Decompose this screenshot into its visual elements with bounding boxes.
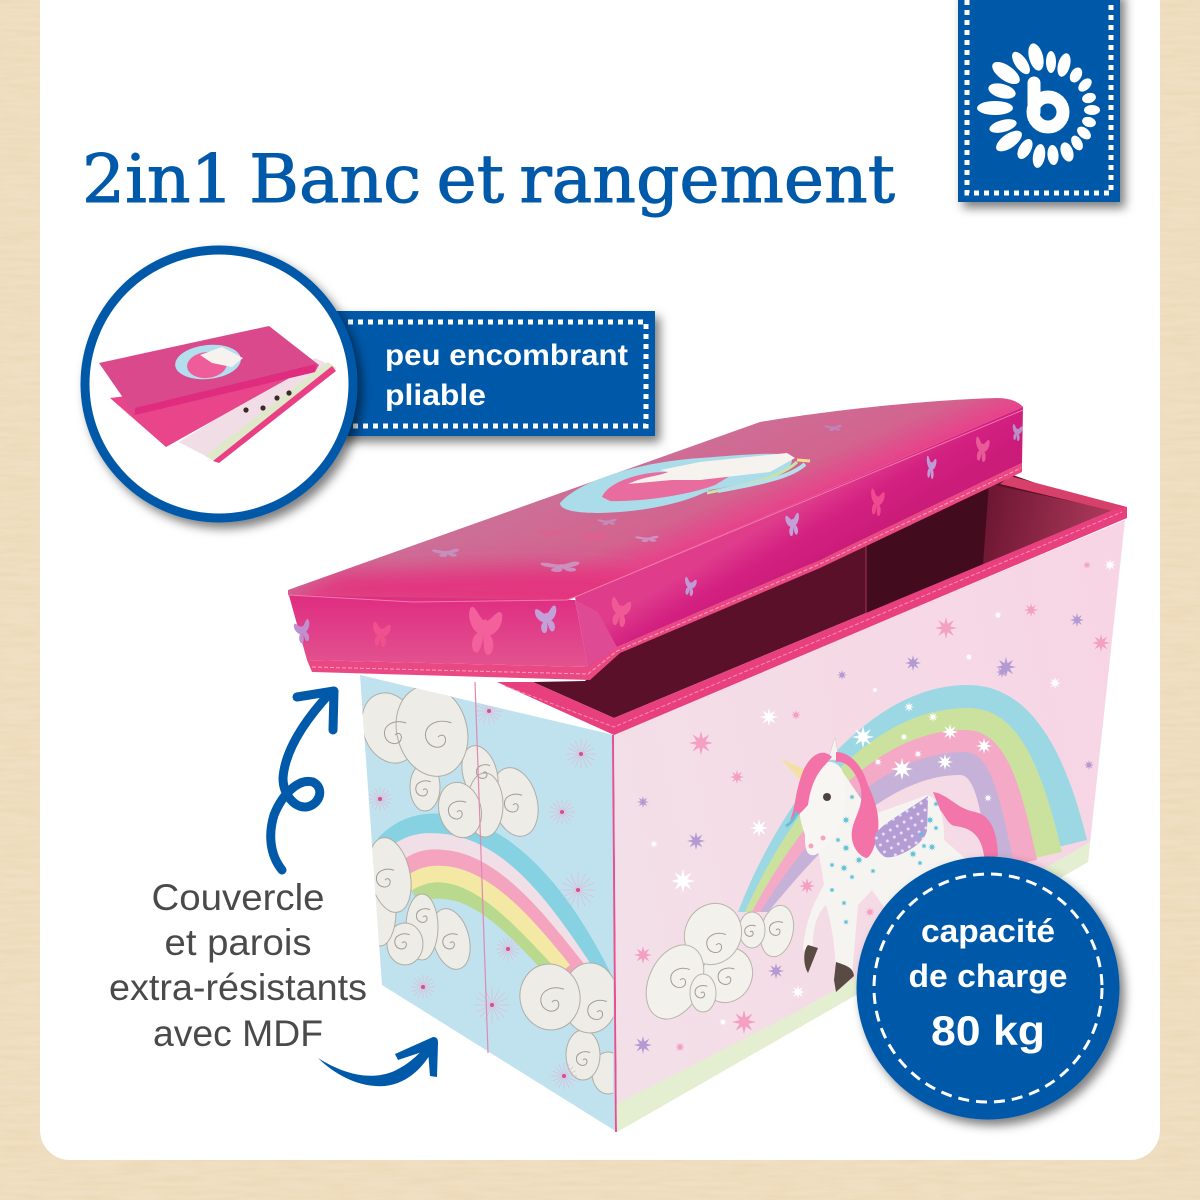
lid motif: [560, 453, 810, 513]
lid top face: [288, 398, 1023, 600]
title: 2in1 Banc et rangement: [82, 141, 895, 218]
icon: bomb flower logo: [977, 42, 1100, 169]
box front panel: [614, 520, 1125, 1134]
badge: capacité de charge 80 kg: 80 kg: [931, 1007, 1045, 1054]
badge: capacité de charge 80 kg: de charge: [908, 958, 1068, 994]
lid bottom strip: [307, 463, 1022, 680]
ground strip: [615, 842, 1090, 1134]
text block: Couvercle et parois: Couvercle: [152, 877, 324, 918]
butterflies: [293, 424, 1023, 657]
label: peu encombrant pliable: peu encombrant: [385, 339, 628, 372]
lid: [270, 390, 1040, 680]
label: peu encombrant pliable: [335, 311, 655, 436]
text block: Couvercle et parois: extra-résistants: [109, 967, 367, 1008]
text block: Couvercle et parois: [109, 877, 367, 1054]
text block: Couvercle et parois: avec MDF: [153, 1013, 323, 1054]
arrow: to base: [318, 1037, 438, 1086]
logo tag: [958, 0, 1120, 202]
badge: capacité de charge 80 kg: [856, 856, 1120, 1120]
product: storage box: [270, 390, 1127, 1134]
lid side faces: [575, 407, 1023, 667]
rainbow: [738, 685, 1087, 912]
unicorn: [780, 737, 998, 992]
stars: [634, 561, 1110, 1052]
text block: Couvercle et parois: et parois: [164, 922, 312, 963]
label: peu encombrant pliable: pliable: [385, 379, 486, 412]
circle: folded box photo: [85, 250, 353, 518]
arrow: to lid: [271, 691, 334, 870]
box interior: [533, 474, 1113, 718]
cloud: [646, 902, 794, 1020]
box left panel: [352, 675, 624, 1132]
badge: capacité de charge 80 kg: capacité: [921, 913, 1055, 949]
box rim: [497, 476, 1127, 735]
